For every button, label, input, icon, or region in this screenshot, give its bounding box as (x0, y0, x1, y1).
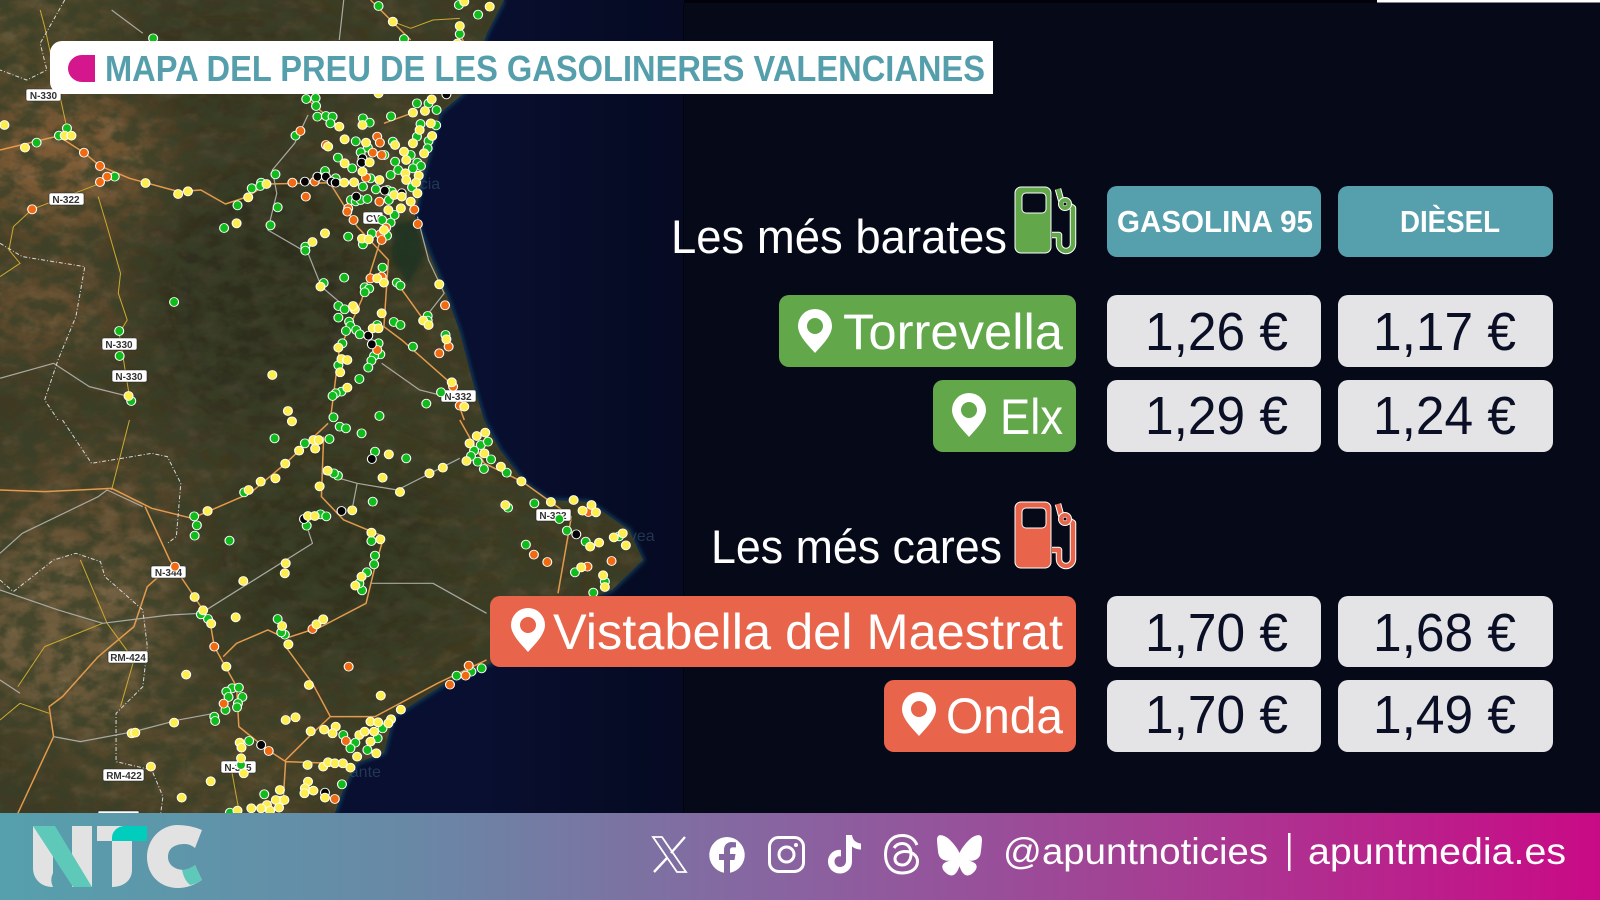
road shields: N-330 (115, 372, 143, 383)
black stations south (257, 455, 581, 797)
price: Onda gasoline (1107, 680, 1321, 752)
logo: NTC (33, 825, 202, 888)
price: Elx gasoline (1107, 380, 1321, 452)
panel edge line (683, 3, 684, 813)
price: Vistabella gasoline (1107, 596, 1321, 667)
black stations north (300, 90, 451, 349)
price: Torrevella gasoline: 1,26 € (1145, 302, 1288, 362)
road shields: N-325 (224, 763, 252, 774)
icon: location pin (798, 309, 832, 353)
price: Vistabella diesel: 1,68 € (1373, 603, 1516, 663)
price: Elx diesel (1338, 380, 1553, 452)
road network south (0, 420, 571, 813)
title banner (50, 41, 993, 94)
label: Vistabella del Maestrat: Vistabella del Maestrat (553, 604, 1063, 660)
map (0, 0, 684, 820)
icon: location pin (902, 692, 936, 736)
price: Torrevella gasoline (1107, 295, 1321, 367)
website text: apuntmedia.es (1308, 831, 1566, 872)
road shields: CV (366, 214, 380, 225)
icon: red fuel pump (1015, 502, 1073, 568)
column header: diesel (1338, 186, 1553, 257)
road shields (26, 89, 571, 815)
road shields: N-330 (105, 340, 133, 351)
icon: Bluesky (937, 835, 982, 875)
column header: diesel: DIÈSEL (1400, 204, 1500, 239)
title text: MAPA DEL PREU DE LES GASOLINERES VALENCIANES (105, 48, 985, 89)
road shields: N-332 (444, 392, 472, 403)
footer band (0, 813, 1600, 900)
place names on map: Jávea (612, 528, 655, 545)
place names on map: Valencia (380, 176, 440, 193)
icon: Facebook (709, 837, 745, 873)
fuel station dots north (0, 0, 494, 422)
road shields: RM-424 (110, 653, 146, 664)
label: Vistabella del Maestrat (490, 596, 1076, 667)
label: Onda (884, 680, 1076, 752)
green stations north (32, 1, 483, 422)
orange stations south (171, 508, 616, 803)
price: Torrevella diesel: 1,17 € (1373, 302, 1516, 362)
label: Torrevella: Torrevella (843, 304, 1063, 360)
title tag (68, 55, 95, 82)
price: Onda diesel (1338, 680, 1553, 752)
top strip (684, 0, 1600, 3)
road shields: N-332 (539, 511, 567, 522)
place names on map: Alicante (324, 764, 381, 781)
price: Vistabella diesel (1338, 596, 1553, 667)
column header: gasolina 95: GASOLINA 95 (1117, 204, 1313, 239)
heading: most expensive: Les més cares (711, 520, 1002, 573)
icon: Instagram (770, 838, 804, 872)
yellow stations south (127, 417, 630, 815)
land terrain (0, 0, 660, 820)
road shields: RM-422 (106, 771, 142, 782)
price: Torrevella diesel (1338, 295, 1553, 367)
icon: X (653, 837, 686, 872)
icon: location pin (511, 608, 545, 652)
price: Elx diesel: 1,24 € (1373, 386, 1516, 446)
road shields: N-330 (30, 91, 58, 102)
yellow stations north (0, 0, 494, 415)
price: Vistabella gasoline: 1,70 € (1145, 603, 1288, 663)
icon: location pin (952, 393, 986, 437)
icon: green fuel pump (1015, 187, 1073, 253)
road shields: N-322 (52, 195, 80, 206)
orange stations north (28, 127, 464, 410)
separator (1288, 833, 1290, 871)
road shields: N-344 (155, 568, 183, 579)
icon: Threads (886, 836, 918, 873)
label: Elx: Elx (1000, 389, 1063, 445)
green stations south (190, 422, 624, 817)
price: Onda diesel: 1,49 € (1373, 685, 1516, 745)
handle text: @apuntnoticies (1003, 831, 1268, 872)
price: Elx gasoline: 1,29 € (1145, 386, 1288, 446)
label: Onda: Onda (946, 688, 1063, 744)
icon: TikTok (828, 835, 861, 874)
label: Elx (933, 380, 1076, 452)
road network north (0, 0, 464, 420)
fuel station dots south (127, 417, 630, 817)
label: Torrevella (779, 295, 1076, 367)
sea (335, 0, 684, 813)
place names on map (324, 176, 655, 781)
heading: cheapest: Les més barates (671, 210, 1007, 263)
column header: gasolina 95 (1107, 186, 1321, 257)
coastal shallow water (335, 0, 643, 813)
price: Onda gasoline: 1,70 € (1145, 685, 1288, 745)
